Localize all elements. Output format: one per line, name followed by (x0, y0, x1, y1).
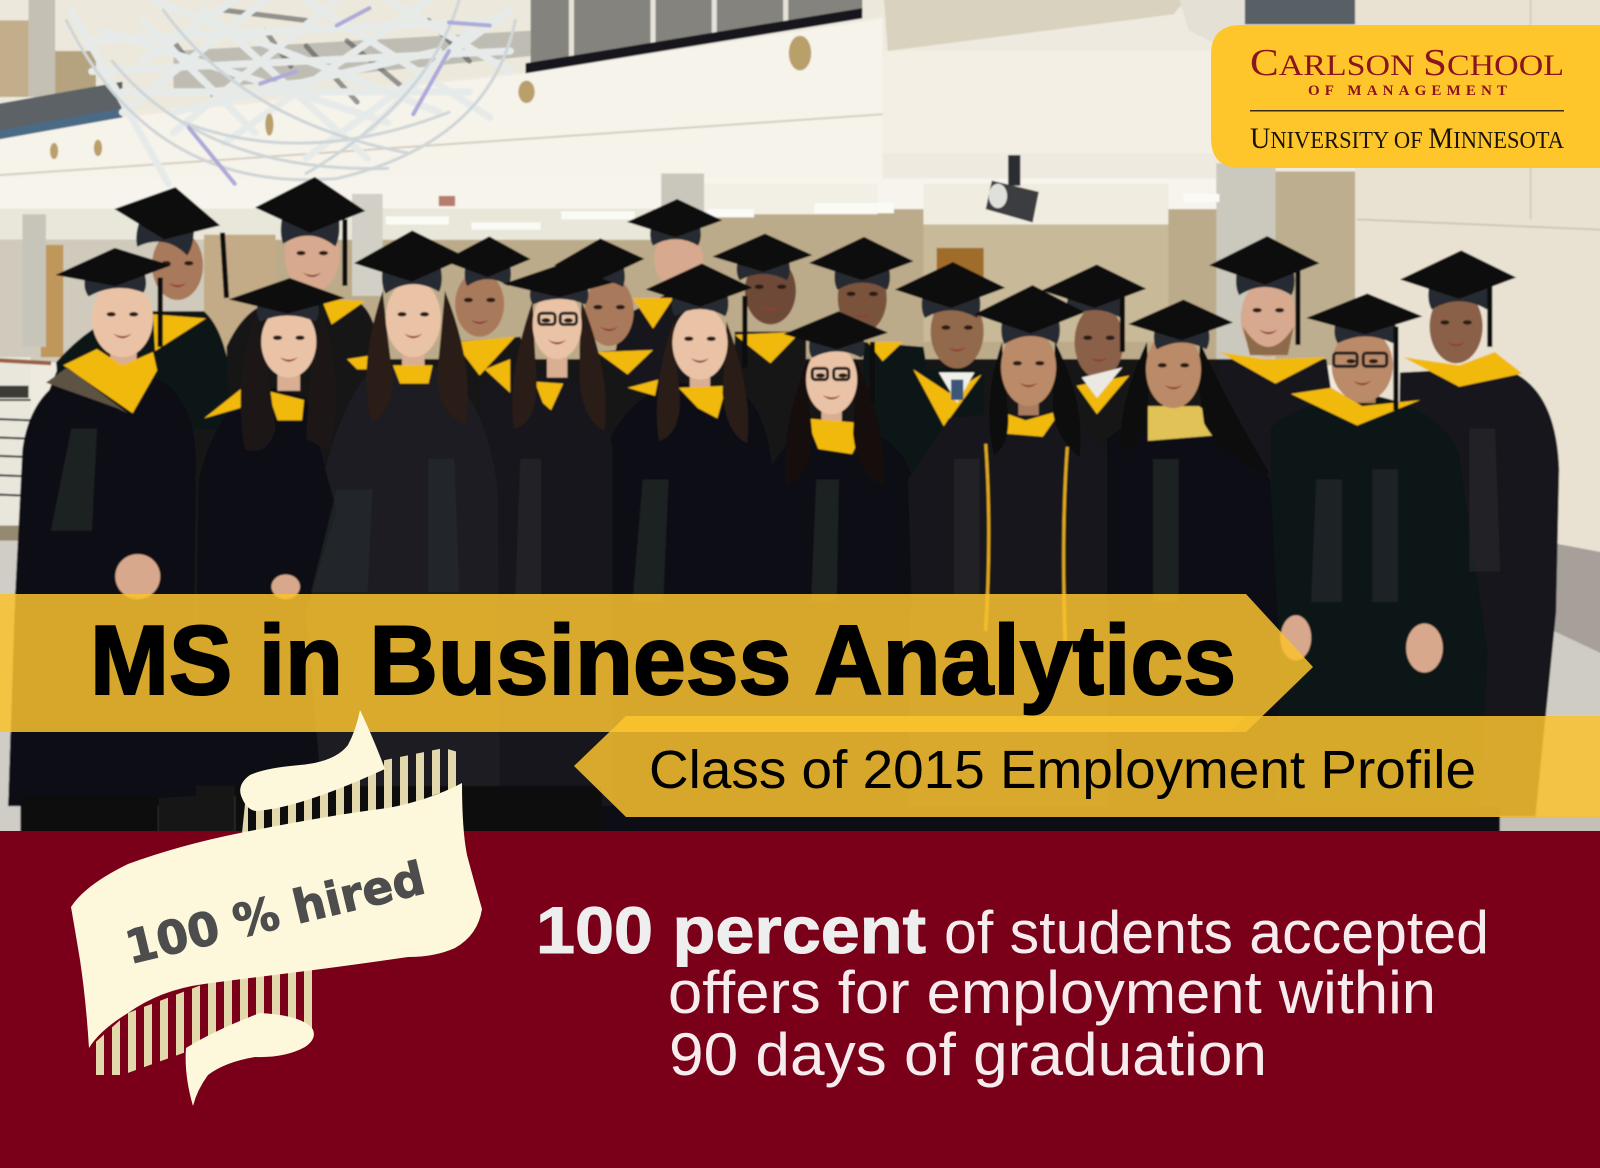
ribbon bottom fold (186, 1013, 314, 1106)
statement line 3: 90 days of graduation (669, 1021, 1267, 1088)
necks (108, 352, 844, 423)
heading: MS in Business Analytics (90, 605, 1236, 715)
statement line 2: offers for employment within (668, 959, 1436, 1026)
atrium background (0, 0, 1600, 847)
subheading: Class of 2015 Employment Profile (649, 740, 1476, 800)
back row graduates (56, 174, 1559, 816)
banner: MS in Business Analytics (0, 594, 1313, 732)
ribbon back stripes top (242, 748, 463, 833)
front row hoods (63, 349, 1420, 454)
statement: 100 percent of students accepted (536, 893, 1489, 1088)
back row faces (152, 231, 1483, 379)
school subtitle: OF MANAGEMENT (1308, 83, 1507, 99)
logo: Carlson School of Management (1211, 25, 1600, 168)
ornament drops (50, 36, 811, 159)
front row faces (92, 280, 857, 414)
photo: graduating class in atrium (0, 0, 1600, 847)
banner: Class of 2015 Employment Profile (574, 716, 1600, 817)
gown base mass (8, 358, 1332, 831)
front row caps (55, 247, 172, 297)
university name: UNIVERSITY OF MINNESOTA (1250, 122, 1565, 155)
hands (115, 554, 1443, 672)
back row hoods (153, 298, 1522, 427)
statement line 1 regular: of students accepted (944, 899, 1489, 966)
fluorescent lights (386, 194, 1219, 230)
long hair (241, 291, 1270, 486)
school name: CARLSON SCHOOL (1250, 42, 1564, 84)
ribbon label: 100 % hired (120, 851, 430, 975)
ribbon back stripes bottom (89, 966, 317, 1075)
exit sign (439, 196, 455, 206)
back row caps (114, 186, 220, 256)
hanging sculpture (66, 0, 515, 184)
ribbon main band (71, 783, 482, 1048)
ribbon top fold (240, 710, 385, 811)
glasses (539, 313, 1387, 380)
maroon footer panel (0, 831, 1600, 1168)
gown folds (51, 429, 1500, 602)
statement line 1 bold: 100 percent (536, 893, 926, 967)
front row graduates (8, 229, 1500, 847)
projector (986, 155, 1039, 222)
ribbon: 100 % hired (71, 710, 482, 1106)
